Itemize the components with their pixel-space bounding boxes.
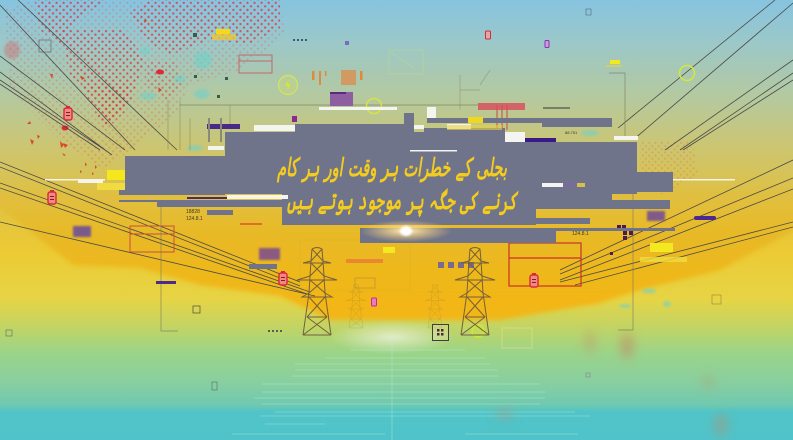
water reflection — [232, 320, 590, 440]
small data blocks: 18828 — [186, 209, 200, 215]
small data blocks: 124.8.1 — [186, 216, 203, 222]
teal blobs — [140, 47, 671, 308]
accent blocks on banner — [447, 117, 585, 187]
thin HUD frames and lines — [6, 9, 721, 390]
icon: square grid tile — [432, 324, 448, 340]
power lines — [0, 0, 793, 296]
rings and battery icons — [48, 31, 694, 337]
small data blocks — [73, 29, 716, 332]
gray glitch banner — [119, 113, 675, 269]
small data blocks: 124.8.1 — [572, 231, 589, 237]
halftone red dots — [4, 0, 698, 195]
white glitch strips — [45, 107, 735, 199]
urdu headline — [276, 153, 519, 218]
hills — [0, 160, 793, 320]
headline line 1: بجلی کے خطرات ہر وقت اور ہر کام — [276, 153, 508, 183]
headline line 2: کرنے کی جگہ پر موجود ہوتے ہیں — [287, 186, 519, 218]
lens flare — [360, 220, 452, 242]
faint brown stains — [495, 330, 728, 437]
transmission towers — [297, 248, 495, 335]
small data blocks: 88.751 — [565, 130, 578, 135]
red outlined boxes — [130, 55, 581, 286]
